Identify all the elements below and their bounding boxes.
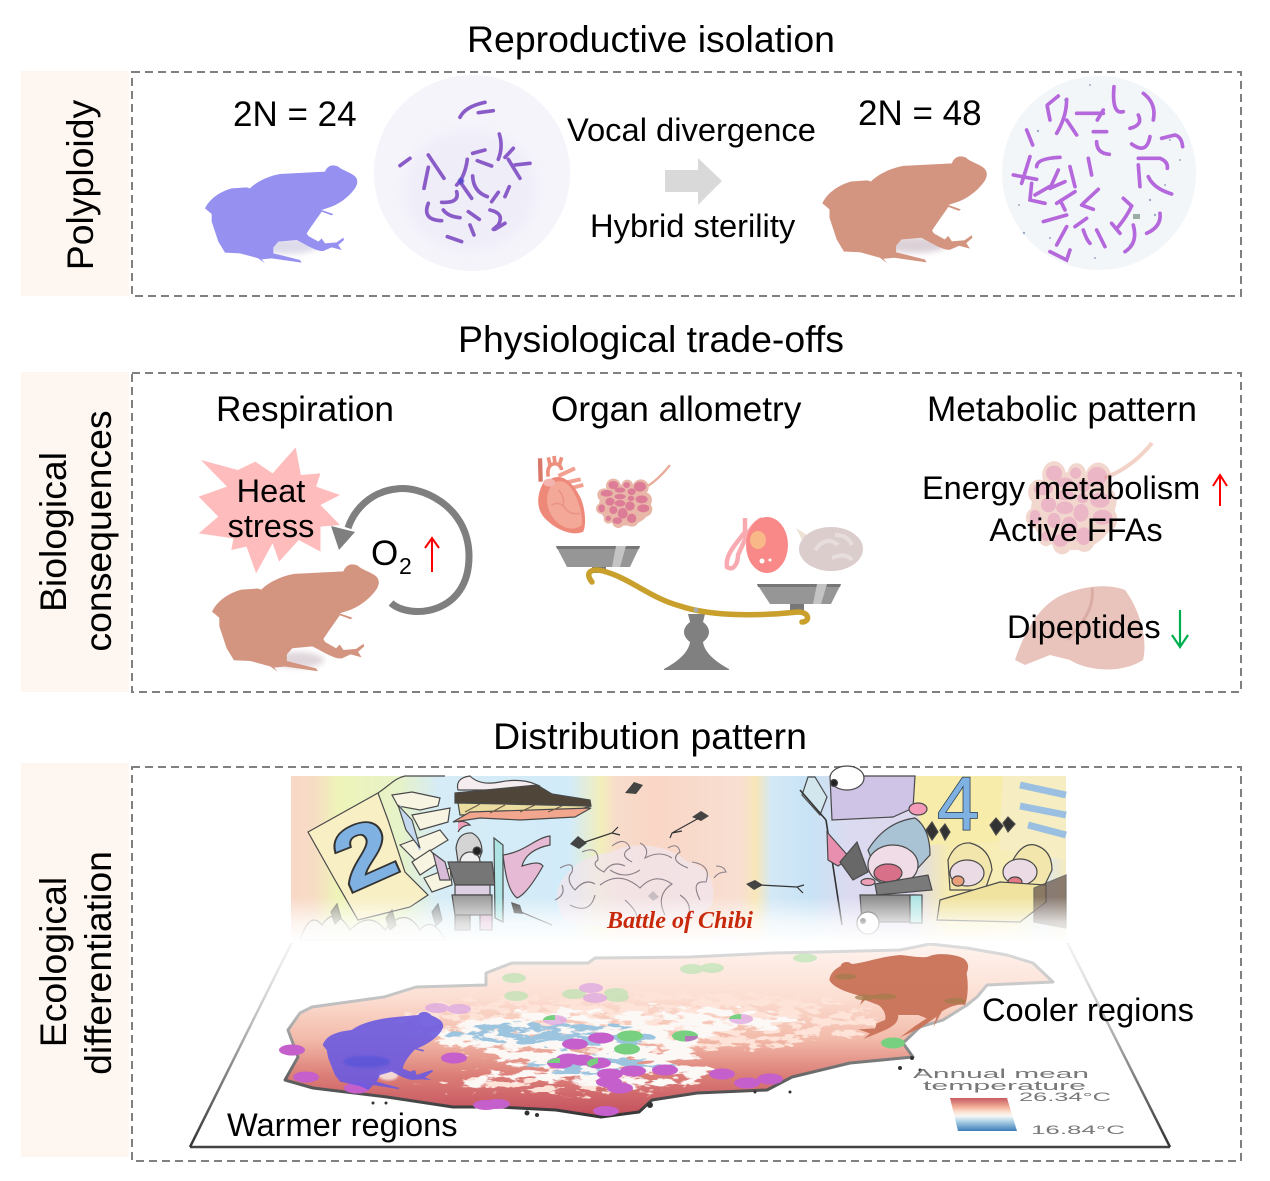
heading: Distribution pattern: Distribution pattern xyxy=(493,715,807,757)
icon: fat body, pale xyxy=(1026,443,1152,554)
side label: Ecological differentiation xyxy=(32,851,119,1075)
fire xyxy=(555,841,726,928)
side label: Biological consequences: Biological xyxy=(32,452,74,612)
map plane edges xyxy=(190,940,1170,1147)
icon: frog under heat stress xyxy=(212,564,379,672)
icon: heart xyxy=(538,456,585,533)
illustration: Battle of Chibi watercolor xyxy=(286,762,1071,943)
label: Hybrid sterility: Hybrid sterility xyxy=(590,207,796,244)
icon: heat stress starburst xyxy=(199,447,340,573)
icon: liver xyxy=(1015,586,1144,669)
legend: annual mean temperature: 16.84°C xyxy=(1031,1123,1126,1137)
icon: blue frog on warm region xyxy=(323,1012,443,1090)
icon: balance scale xyxy=(556,546,841,670)
label: O2 with up arrow: 2 xyxy=(399,553,412,579)
label: O2 with up arrow: O xyxy=(371,534,398,573)
text: Energy metabolism: Energy metabolism xyxy=(922,470,1200,506)
heading: Reproductive isolation: Reproductive isolation xyxy=(467,18,835,60)
label: Heat stress xyxy=(228,473,314,544)
legend: annual mean temperature: 26.34°C xyxy=(1019,1090,1112,1104)
side label: Ecological differentiation: Ecological xyxy=(32,877,74,1047)
chromosome spread: 24 xyxy=(374,75,570,271)
icon: testis xyxy=(727,517,788,573)
legend: annual mean temperature: temperature xyxy=(923,1079,1086,1093)
label: Heat stress: Heat xyxy=(237,473,305,509)
banner numeral 4: 4 xyxy=(937,762,979,847)
panel: biological consequences dashed box xyxy=(132,373,1241,692)
label: 2N = 48: 2N = 48 xyxy=(858,94,982,133)
dragon ship xyxy=(453,776,591,822)
text: Dipeptides: Dipeptides xyxy=(1007,609,1161,645)
right sail xyxy=(800,766,1066,925)
panel: ecological differentiation dashed box xyxy=(132,767,1241,1161)
side label: Biological consequences xyxy=(32,410,119,652)
subheading: Metabolic pattern: Metabolic pattern xyxy=(927,390,1197,429)
panel label background: Ecological differentiation xyxy=(21,763,129,1157)
arrow: dipeptides down xyxy=(1172,610,1188,647)
left banner and flags xyxy=(308,776,452,920)
legend: annual mean temperature xyxy=(913,1067,1126,1137)
side label: Biological consequences: consequences xyxy=(77,410,119,652)
panel label background: Biological consequences xyxy=(21,372,129,692)
subheading: Respiration: Respiration xyxy=(216,390,394,429)
banner numeral 2: 2 xyxy=(319,799,410,910)
icon: fat body, pink xyxy=(596,465,670,528)
icon: pale kidney-like organ xyxy=(796,527,863,571)
legend: annual mean temperature: Annual mean xyxy=(913,1067,1089,1081)
label: Heat stress: stress xyxy=(228,508,314,544)
soldiers xyxy=(827,817,1066,934)
heading: Physiological trade-offs: Physiological trade-offs xyxy=(458,318,844,360)
arrow: grey block arrow xyxy=(665,158,722,205)
panel label background: Polyploidy xyxy=(21,71,129,296)
label: Warmer regions: Warmer regions xyxy=(227,1106,458,1143)
panel: polyploidy dashed box xyxy=(132,72,1241,296)
side label: Polyploidy: Polyploidy xyxy=(59,99,101,270)
chromosome spread: 48 xyxy=(1002,76,1196,270)
illustration title: Battle of Chibi: Battle of Chibi xyxy=(606,908,753,934)
icon: tetraploid frog xyxy=(822,156,987,263)
map: island temperature heat map xyxy=(285,944,1053,1117)
icon: circular respiration arrow xyxy=(331,489,469,611)
warrior xyxy=(433,821,550,930)
crowd of pikes xyxy=(300,904,445,940)
label: 2N = 24: 2N = 24 xyxy=(233,95,357,134)
label: Cooler regions: Cooler regions xyxy=(982,991,1194,1028)
side label: Ecological differentiation: differentiation xyxy=(77,851,119,1075)
label: O2 with up arrow xyxy=(371,534,439,579)
icon: orange frog on cool region xyxy=(829,954,968,1039)
map: population pie markers xyxy=(279,954,905,1116)
label: Vocal divergence: Vocal divergence xyxy=(567,111,816,148)
text: Active FFAs: Active FFAs xyxy=(989,512,1163,548)
subheading: Organ allometry: Organ allometry xyxy=(551,390,802,429)
arrow: energy metabolism up xyxy=(1213,475,1227,506)
icon: diploid frog xyxy=(205,165,357,263)
flying arrows xyxy=(511,782,804,925)
